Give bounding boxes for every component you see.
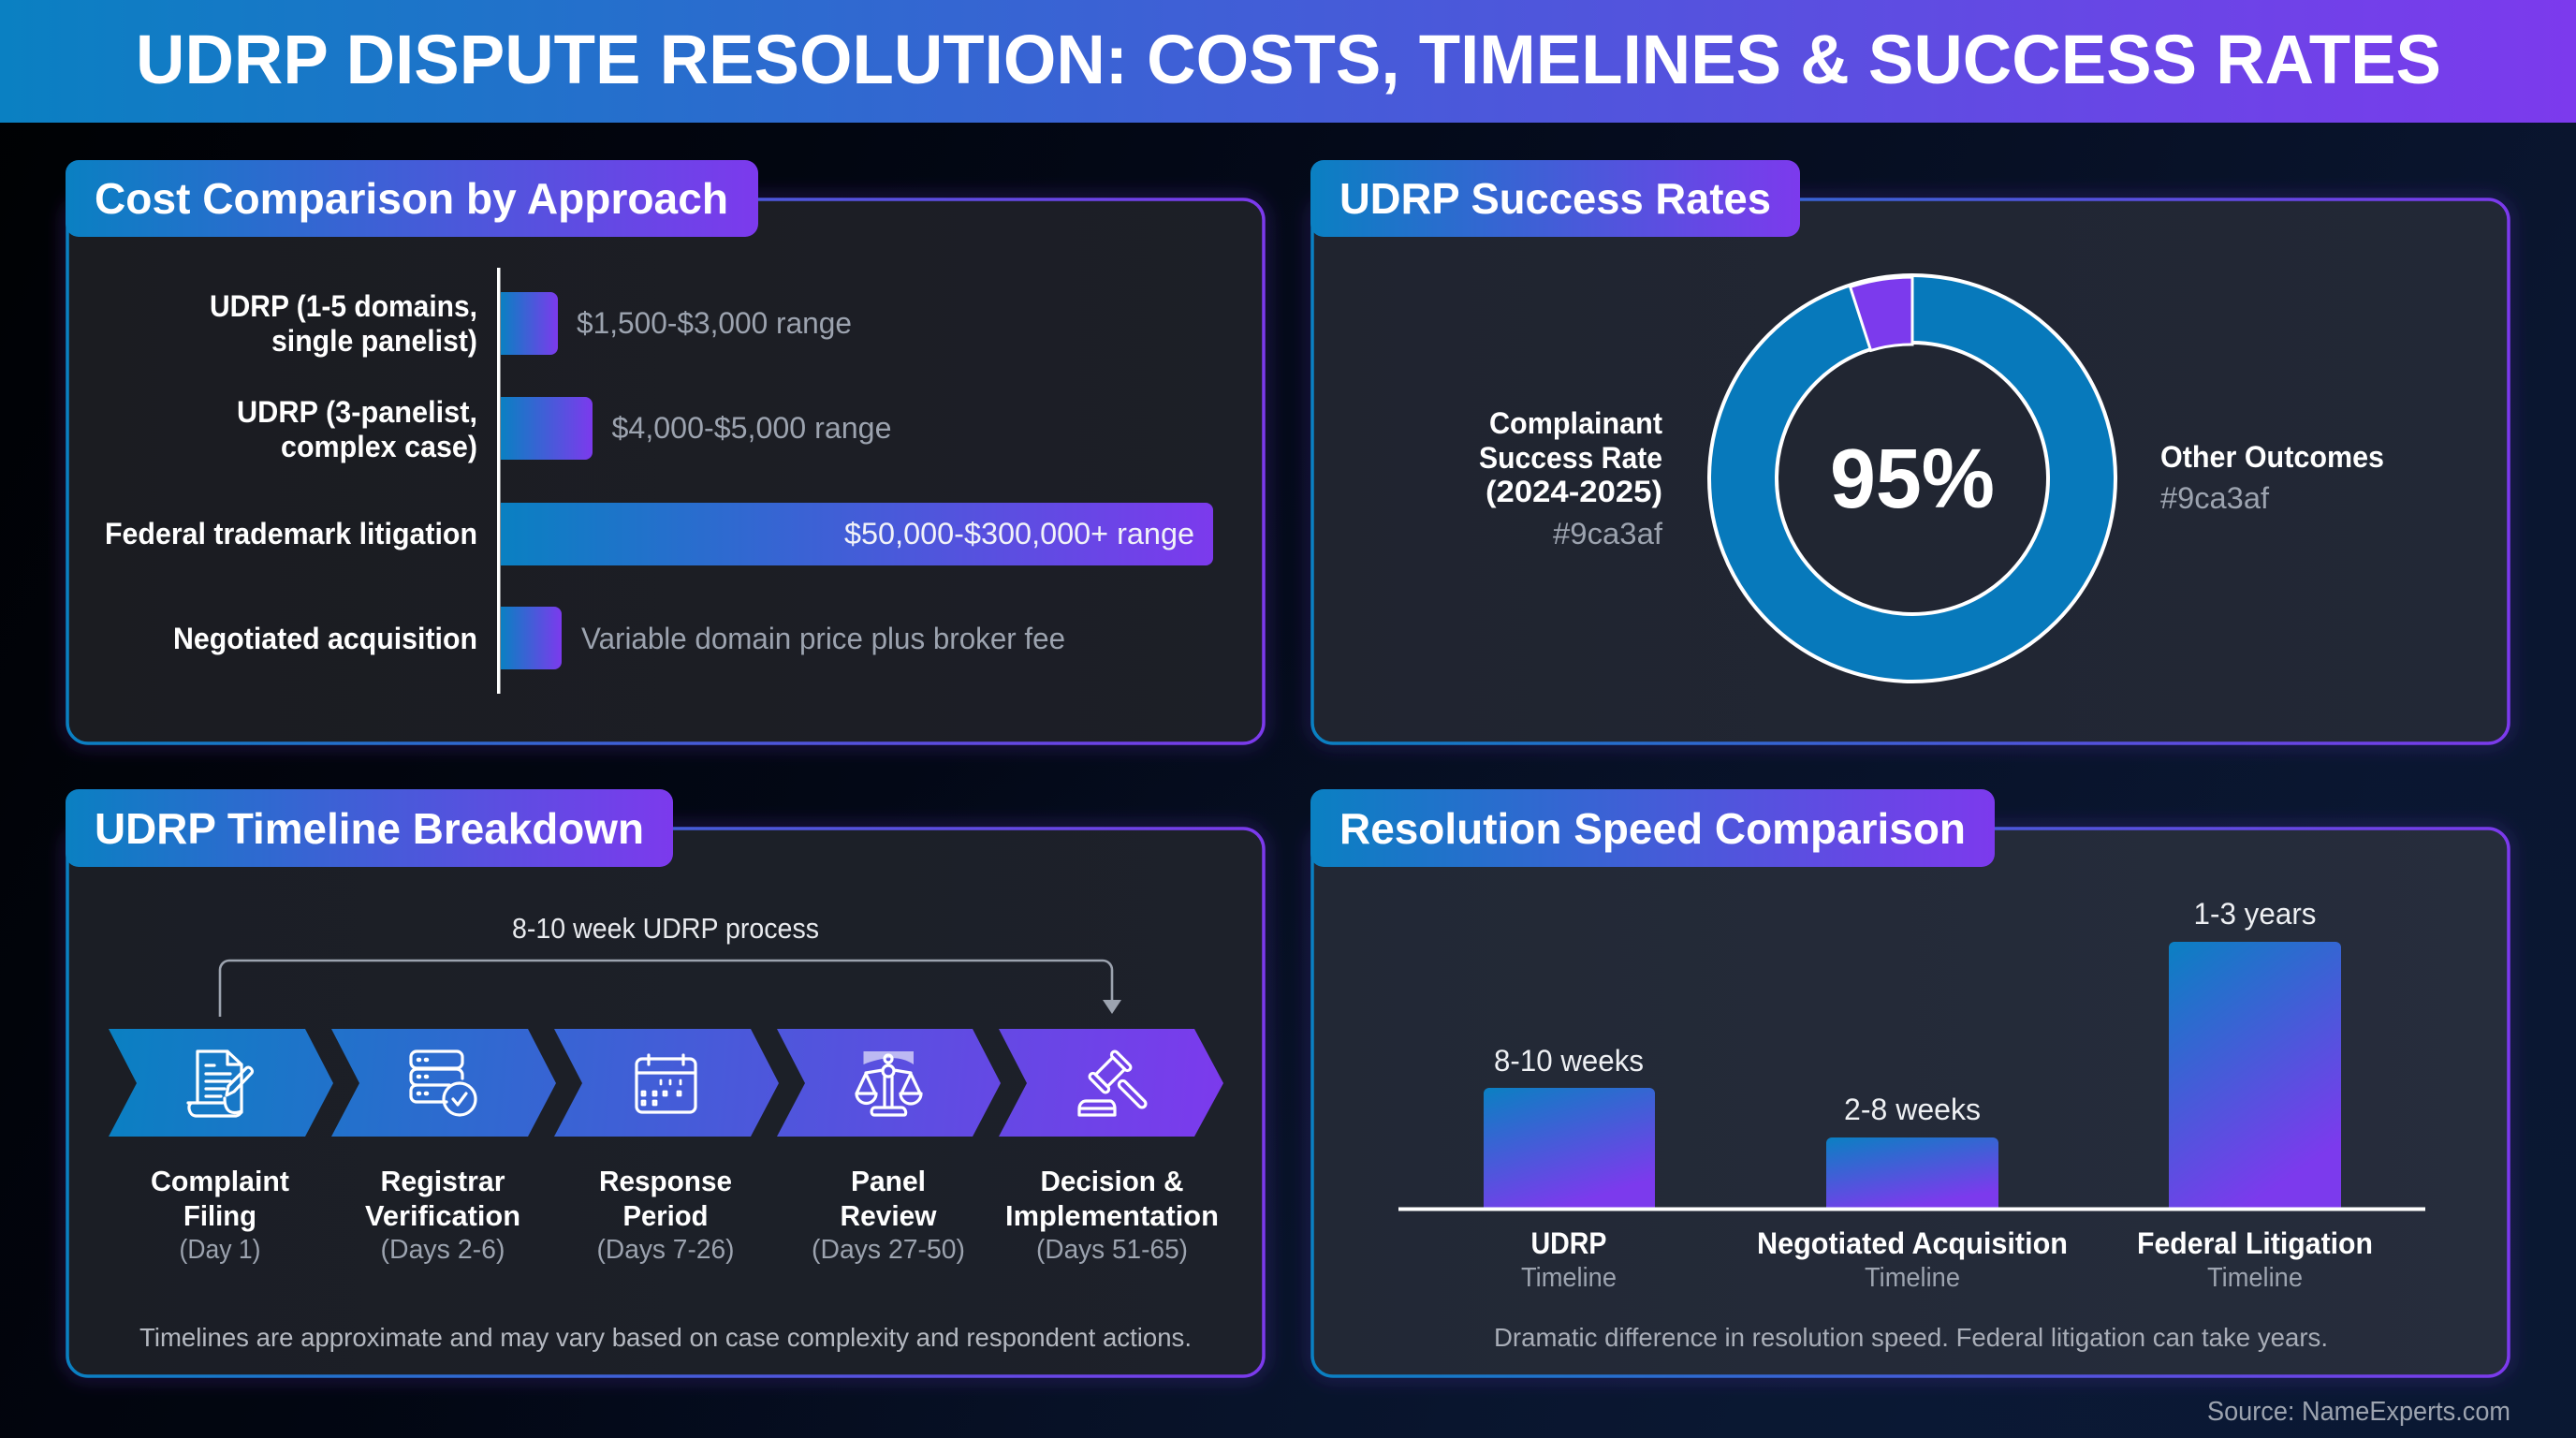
bracket arrow: 8-10 week process bbox=[220, 912, 1121, 1017]
legend: complainant success rate: #9ca3af bbox=[1553, 517, 1662, 550]
heading: cost comparison: Cost Comparison by Approach bbox=[95, 174, 728, 223]
bar chart: speed bbox=[1398, 897, 2425, 1293]
legend: other outcomes: #9ca3af bbox=[2160, 481, 2269, 515]
heading: success rates bbox=[1310, 160, 1800, 237]
icon: document and pencil bbox=[188, 1051, 252, 1116]
step label bbox=[812, 1165, 965, 1265]
legend: complainant success rate: Success Rate bbox=[1479, 441, 1662, 475]
icon: gavel bbox=[1079, 1050, 1158, 1120]
icon: server with check bbox=[411, 1051, 476, 1115]
footnote: speed: Dramatic difference in resolution speed. Federal litigation can take years. bbox=[1494, 1323, 2328, 1352]
horizontal bar chart: costs bbox=[105, 268, 1213, 694]
step label: Panel bbox=[851, 1165, 926, 1197]
header banner bbox=[0, 0, 2576, 123]
step label: (Days 7-26) bbox=[597, 1235, 734, 1265]
step label: Registrar bbox=[380, 1165, 505, 1197]
legend: complainant success rate: Complainant bbox=[1489, 406, 1662, 440]
step label: Response bbox=[599, 1165, 732, 1197]
bar: UDRP three panelist bbox=[237, 395, 891, 463]
bar: negotiated acquisition bbox=[1757, 1093, 2068, 1293]
heading: resolution speed: Resolution Speed Comparison bbox=[1339, 804, 1966, 853]
bar: UDRP single panelist bbox=[210, 289, 852, 358]
icon: scales of justice bbox=[856, 1051, 921, 1115]
step label bbox=[151, 1165, 289, 1265]
bar: negotiated acquisition: Negotiated Acquisition bbox=[1757, 1226, 2068, 1260]
center value: 95% bbox=[1830, 433, 1995, 526]
step label: (Days 51-65) bbox=[1036, 1235, 1188, 1265]
step 2: registrar verification bbox=[331, 1029, 556, 1265]
bar: UDRP three panelist: UDRP (3-panelist, bbox=[237, 395, 477, 429]
panel: success rates bbox=[1310, 160, 2509, 743]
heading: timeline: UDRP Timeline Breakdown bbox=[95, 804, 644, 853]
step label: Filing bbox=[183, 1199, 256, 1232]
step 3: response period bbox=[554, 1029, 779, 1265]
bar: negotiated acquisition bbox=[173, 607, 1065, 669]
bar: federal litigation: Federal Litigation bbox=[2137, 1226, 2373, 1260]
heading: success rates: UDRP Success Rates bbox=[1339, 174, 1771, 223]
bar: UDRP: UDRP bbox=[1531, 1226, 1606, 1260]
heading: resolution speed bbox=[1310, 789, 1995, 867]
bar: UDRP: Timeline bbox=[1521, 1263, 1617, 1293]
bar: federal trademark litigation: Federal trademark litigation bbox=[105, 517, 477, 550]
bar: federal litigation bbox=[2137, 897, 2373, 1293]
step label: (Day 1) bbox=[180, 1235, 260, 1265]
step 5: decision and implementation bbox=[999, 1029, 1223, 1265]
step label bbox=[1005, 1165, 1219, 1265]
step label: Review bbox=[841, 1199, 937, 1232]
bar: UDRP single panelist: single panelist) bbox=[271, 324, 477, 358]
step label bbox=[365, 1165, 520, 1265]
legend: complainant success rate bbox=[1479, 406, 1662, 550]
bar: UDRP single panelist: $1,500-$3,000 range bbox=[577, 306, 852, 340]
step label: Complaint bbox=[151, 1165, 289, 1197]
bar: negotiated acquisition: Negotiated acquisition bbox=[173, 622, 477, 655]
bar: UDRP bbox=[1484, 1044, 1655, 1293]
source credit: Source: NameExperts.com bbox=[2207, 1397, 2510, 1427]
step label: (Days 27-50) bbox=[812, 1235, 965, 1265]
bar: negotiated acquisition: Variable domain price plus broker fee bbox=[581, 622, 1065, 655]
footnote: timeline: Timelines are approximate and may vary based on case complexity and respondent actions. bbox=[139, 1323, 1192, 1352]
bar: negotiated acquisition: Timeline bbox=[1865, 1263, 1960, 1293]
bar: federal trademark litigation: $50,000-$300,000+ range bbox=[844, 517, 1194, 550]
heading: cost comparison bbox=[66, 160, 758, 237]
step label: Period bbox=[623, 1199, 708, 1232]
panel: cost comparison bbox=[66, 160, 1264, 743]
donut slice: other outcomes bbox=[1851, 277, 1912, 350]
legend: other outcomes bbox=[2160, 440, 2384, 515]
bar: UDRP: 8-10 weeks bbox=[1494, 1044, 1644, 1078]
icon: calendar bbox=[637, 1055, 695, 1112]
bracket arrow: 8-10 week process: 8-10 week UDRP process bbox=[512, 912, 819, 945]
step label: Verification bbox=[365, 1199, 520, 1232]
bar: federal trademark litigation bbox=[105, 503, 1213, 565]
panel: timeline breakdown bbox=[66, 789, 1264, 1376]
bar: federal litigation: Timeline bbox=[2207, 1263, 2303, 1293]
bar: federal litigation: 1-3 years bbox=[2194, 897, 2316, 931]
bar: negotiated acquisition: 2-8 weeks bbox=[1844, 1093, 1981, 1126]
bar: UDRP three panelist: complex case) bbox=[281, 430, 477, 463]
step 4: panel review bbox=[777, 1029, 1001, 1265]
step label bbox=[597, 1165, 734, 1265]
title: UDRP DISPUTE RESOLUTION: COSTS, TIMELINES & SUCCESS RATES bbox=[136, 21, 2441, 98]
step 1: complaint filing bbox=[109, 1029, 333, 1265]
step label: Implementation bbox=[1005, 1199, 1219, 1232]
bar: UDRP three panelist: $4,000-$5,000 range bbox=[612, 411, 891, 445]
step label: Decision & bbox=[1041, 1165, 1183, 1197]
legend: complainant success rate: (2024-2025) bbox=[1486, 475, 1662, 508]
panel: resolution speed bbox=[1310, 789, 2509, 1376]
step label: (Days 2-6) bbox=[380, 1235, 505, 1265]
bar: UDRP single panelist: UDRP (1-5 domains, bbox=[210, 289, 477, 323]
legend: other outcomes: Other Outcomes bbox=[2160, 440, 2384, 474]
donut chart: 95 percent bbox=[1743, 277, 2082, 648]
heading: timeline bbox=[66, 789, 673, 867]
